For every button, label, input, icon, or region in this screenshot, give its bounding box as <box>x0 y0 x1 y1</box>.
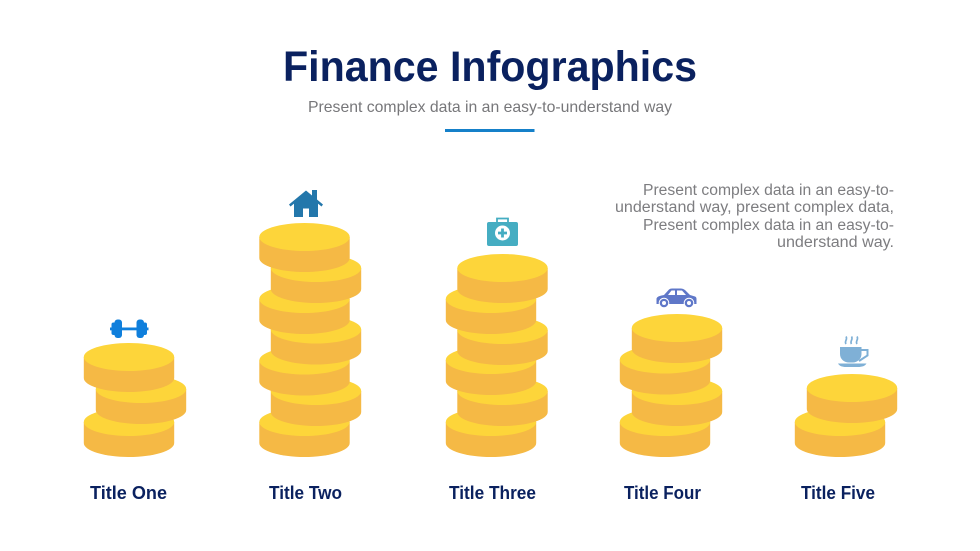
title underline <box>445 129 534 132</box>
description text block: Present complex data in an easy-to- <box>643 217 894 234</box>
column one: coin stack <box>84 343 186 457</box>
column five: coin stack <box>795 374 897 457</box>
description text block: Present complex data in an easy-to- <box>643 182 894 199</box>
icon: house <box>289 190 323 217</box>
column three: coin stack <box>446 254 548 457</box>
column two label: Title Two <box>269 483 342 503</box>
column four label: Title Four <box>624 483 701 503</box>
description text block: understand way. <box>777 234 894 251</box>
icon: dumbbell <box>110 320 148 338</box>
column three label: Title Three <box>449 483 536 503</box>
description text block: understand way, present complex data, <box>615 199 894 216</box>
icon: medical case <box>487 218 518 246</box>
title: Finance Infographics <box>283 43 697 91</box>
column two: coin stack <box>259 223 361 457</box>
column five label: Title Five <box>801 483 875 503</box>
icon: coffee cup <box>838 336 868 367</box>
description text block <box>615 182 894 251</box>
subtitle: Present complex data in an easy-to-understand way <box>308 99 672 116</box>
icon: car <box>656 288 696 308</box>
column four: coin stack <box>620 314 722 457</box>
column one label: Title One <box>90 483 167 503</box>
